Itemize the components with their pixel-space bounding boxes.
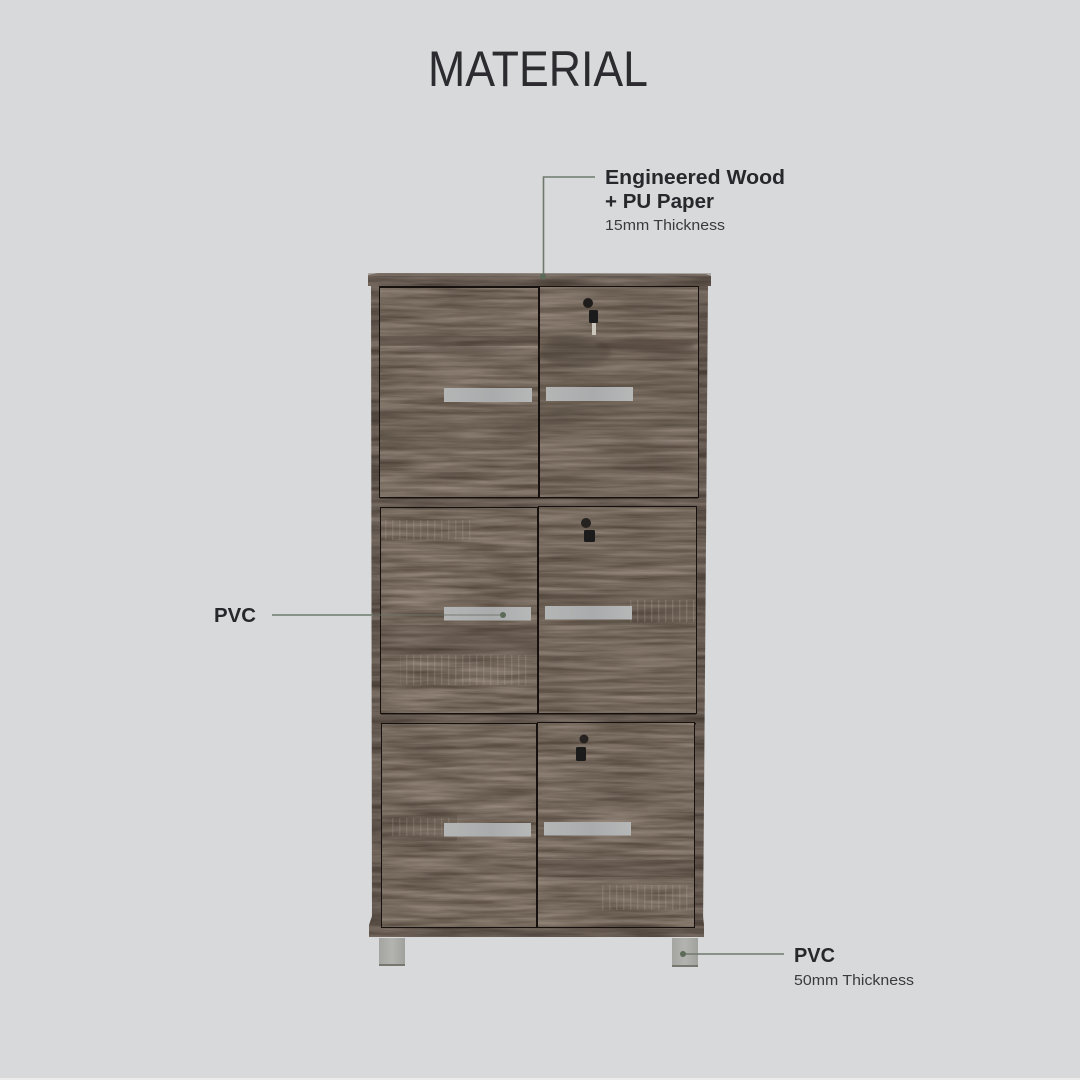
lock and key: bottom — [576, 734, 588, 761]
lock and key: top — [583, 298, 598, 335]
base plinth — [369, 916, 704, 937]
shelf dividers — [380, 497, 698, 724]
callout: side PVC label: PVC — [214, 604, 256, 627]
lock and key: middle — [581, 518, 595, 542]
callout: leg PVC label — [794, 944, 914, 989]
callout: engineered wood leader — [540, 177, 595, 280]
legs — [379, 938, 698, 967]
cabinet frame — [371, 284, 708, 930]
thickness note: 15mm Thickness — [605, 218, 725, 234]
callout: leg PVC leader — [680, 951, 784, 957]
door: middle left — [380, 507, 538, 714]
door: top left — [379, 286, 539, 498]
door: middle right — [538, 506, 697, 714]
door: top right — [539, 286, 699, 498]
door: bottom right — [537, 722, 695, 928]
callout: engineered wood label — [605, 166, 785, 234]
top panel — [368, 273, 711, 286]
label heading: PVC — [794, 944, 835, 967]
callout: side PVC leader — [272, 612, 506, 618]
handles — [444, 387, 633, 836]
cabinet — [368, 273, 711, 967]
label heading line 2: + PU Paper — [605, 190, 714, 213]
label heading: Engineered Wood — [605, 166, 785, 189]
thickness note: 50mm Thickness — [794, 973, 914, 989]
door: bottom left — [381, 723, 537, 928]
title: MATERIAL — [428, 41, 648, 97]
